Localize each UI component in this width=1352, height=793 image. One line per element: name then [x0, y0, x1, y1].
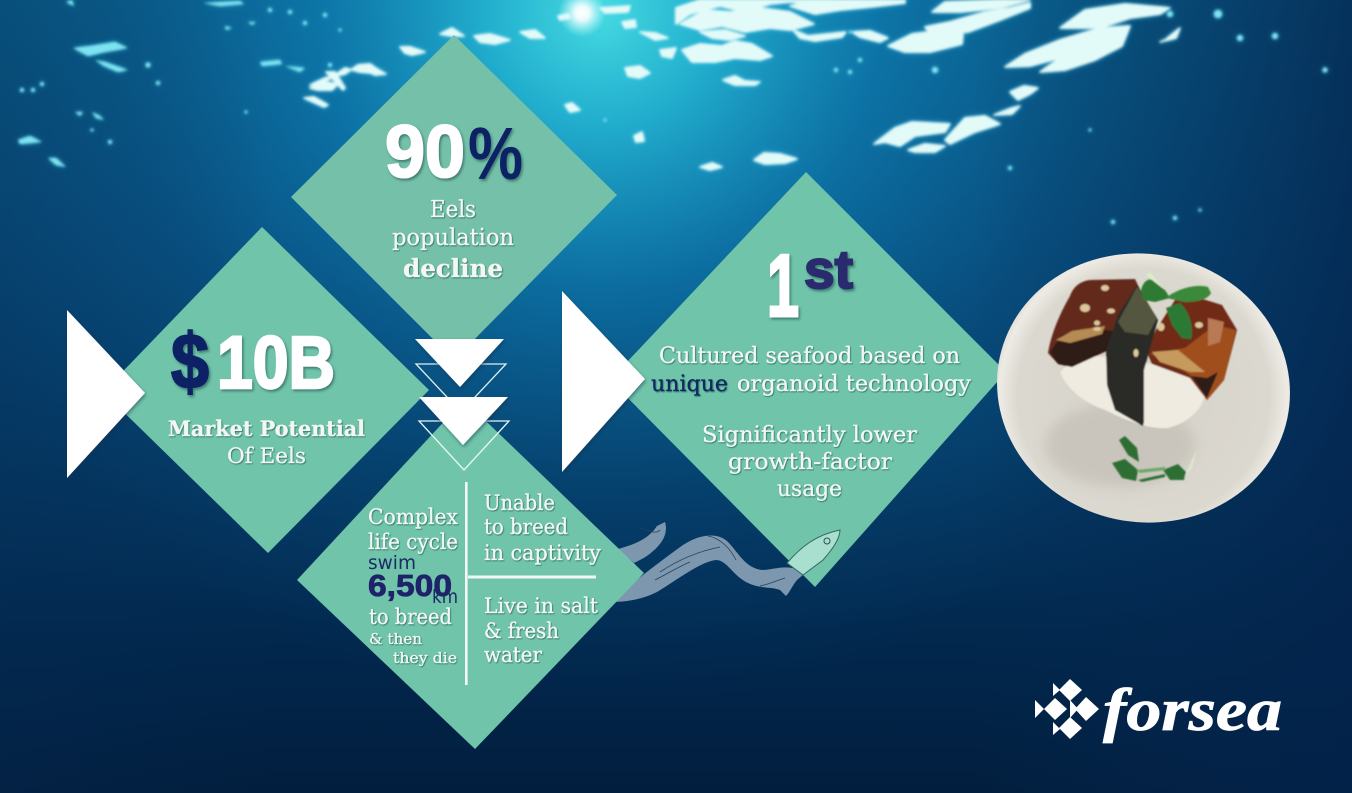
text: eels population decline: decline: [403, 254, 503, 283]
photo: eel sushi on plate: [972, 226, 1315, 550]
stat: $10B: [171, 317, 335, 405]
text: complex life cycle: swim: [368, 552, 416, 574]
text: market potential of eels: Market Potential: [168, 416, 365, 441]
text: cultured seafood description: [651, 344, 972, 502]
illustration: eel: [610, 522, 840, 602]
text: live in salt and fresh water: water: [484, 643, 543, 667]
text: complex life cycle: 6,500: [368, 568, 452, 603]
text: cultured seafood description: Significantly lower: [702, 423, 917, 448]
eel fillet left: [1048, 279, 1145, 367]
text: complex life cycle: [368, 505, 458, 667]
logo: forsea: [1035, 677, 1282, 743]
text: cultured seafood description: Cultured seafood based on: [659, 344, 960, 369]
stat: 90%: 90: [385, 110, 465, 193]
sesame: [1080, 285, 1203, 357]
eel fillet right: [1146, 292, 1237, 400]
text: complex life cycle: to breed: [369, 605, 452, 629]
text: live in salt and fresh water: Live in salt: [484, 594, 599, 618]
divider lines: life cycle panel: [465, 482, 596, 685]
arrow: first down chevron: [415, 339, 506, 412]
panel: cultured seafood diamond: [610, 172, 1006, 587]
text: complex life cycle: they die: [393, 649, 457, 667]
arrow: second down chevron: [419, 397, 509, 470]
panel: market potential diamond: [103, 227, 429, 553]
rice: [1060, 356, 1204, 428]
text: complex life cycle: Complex: [368, 505, 458, 529]
text: cultured seafood description: growth-factor: [728, 450, 893, 475]
nori band: [1106, 285, 1158, 426]
stat: 90%: %: [468, 112, 523, 195]
panel: eel life cycle diamond: [297, 400, 644, 749]
text: cultured seafood description: usage: [777, 477, 842, 502]
text: live in salt and fresh water: & fresh: [484, 619, 559, 643]
stat: 90%: [385, 110, 523, 195]
text: unable to breed in captivity: Unable: [484, 491, 555, 515]
text: market potential of eels: [168, 416, 365, 468]
stat: 1st: st: [804, 240, 853, 300]
text: unable to breed in captivity: to breed: [484, 515, 568, 539]
bottom sprig: [1112, 436, 1186, 482]
text: cultured seafood description: unique: [651, 372, 728, 397]
logo wordmark: forsea: [1103, 677, 1282, 743]
stat: 1st: 1: [767, 236, 799, 335]
arrow: centre white triangle: [562, 291, 645, 472]
leaves: [1141, 279, 1211, 339]
stat: 1st: [767, 236, 853, 335]
stat: $10B: 10B: [217, 321, 335, 404]
text: eels population decline: Eels: [430, 197, 476, 223]
stat: $10B: $: [171, 317, 209, 405]
water caustics: [304, 0, 1180, 170]
text: unable to breed in captivity: [484, 491, 601, 565]
text: market potential of eels: Of Eels: [227, 444, 306, 468]
logo mark: [1035, 679, 1099, 739]
text: eels population decline: [392, 197, 514, 283]
text: complex life cycle: life cycle: [368, 530, 458, 554]
text: complex life cycle: km: [432, 586, 458, 608]
text: complex life cycle: & then: [369, 630, 422, 648]
arrow: left white triangle: [67, 310, 145, 478]
text: cultured seafood description: organoid technology: [737, 372, 972, 397]
panel: population decline diamond: [291, 35, 617, 360]
text: unable to breed in captivity: in captivity: [484, 541, 601, 565]
text: live in salt and fresh water: [484, 594, 599, 667]
text: eels population decline: population: [392, 225, 514, 251]
